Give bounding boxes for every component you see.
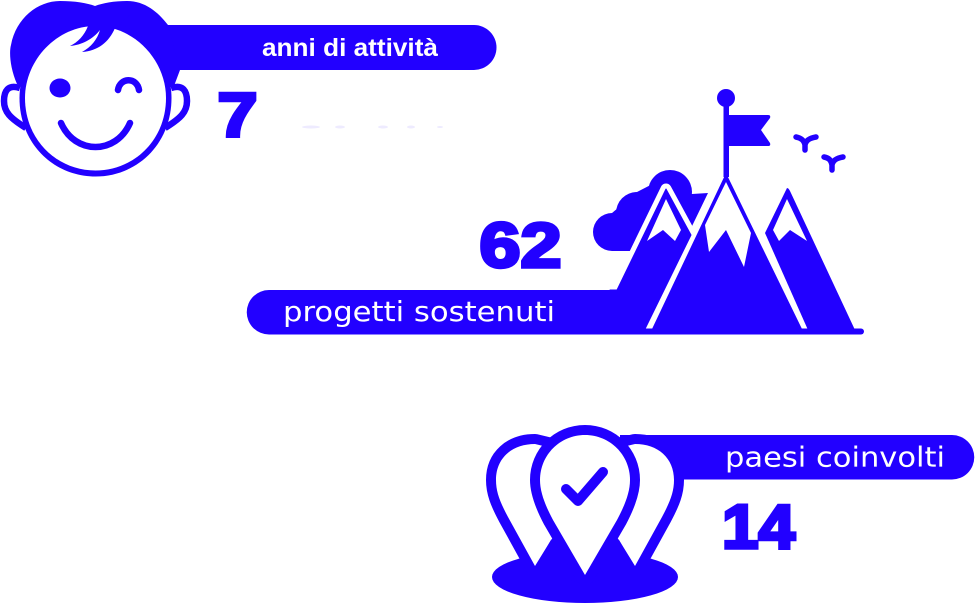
label bar: anni di attività [150, 25, 497, 70]
label: paesi coinvolti: paesi coinvolti [725, 440, 945, 474]
icon: left mountain [610, 189, 691, 329]
white halo of left mountain [617, 189, 691, 290]
number: 14: 14 [722, 493, 796, 562]
icon: central pin [540, 435, 630, 575]
icon: map pins with check mark [492, 435, 678, 603]
panel: anni di attività [4, 1, 497, 176]
number: 7: 7 [218, 82, 258, 150]
faint residual marks [302, 126, 443, 128]
icon: birds [796, 137, 843, 170]
panel: paesi coinvolti [492, 435, 974, 603]
label bar: progetti sostenuti [247, 290, 640, 334]
icon: central mountain [652, 173, 802, 329]
icon: mountains with flag, cloud and birds [593, 89, 864, 334]
icon: check mark [566, 472, 603, 501]
label: anni di attività: anni di attività [262, 34, 438, 62]
icon: right mountain [765, 188, 855, 330]
icon: cloud [593, 170, 708, 251]
ground line [610, 328, 864, 334]
icon: flag [717, 89, 770, 177]
icon: left pin [496, 444, 560, 566]
icon: right pin [610, 444, 674, 566]
panel: progetti sostenuti [247, 89, 864, 334]
icon: smiling boy face [4, 1, 187, 176]
label: progetti sostenuti: progetti sostenuti [283, 295, 555, 328]
label bar: paesi coinvolti [620, 435, 974, 480]
number: 62: 62 [480, 211, 562, 281]
